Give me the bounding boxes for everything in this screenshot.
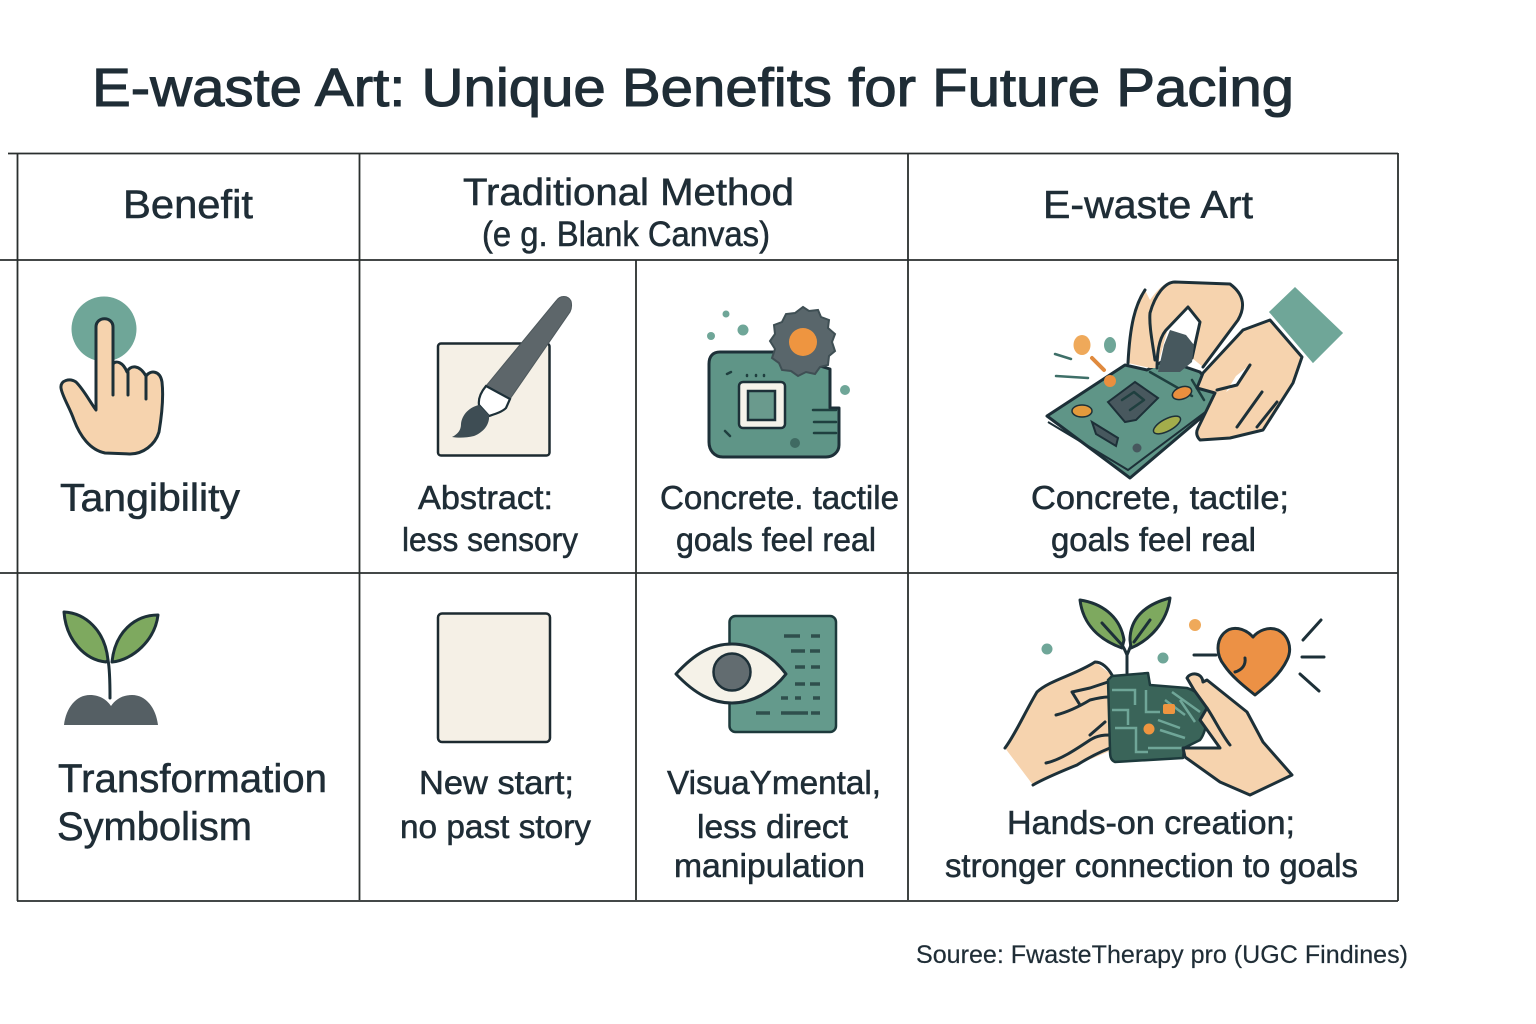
text: hands-on creation: Hands-on creation; — [1007, 804, 1295, 841]
text: abstract — [402, 479, 578, 558]
header: Traditional Method: Traditional Method — [463, 172, 794, 214]
icon: hands holding circuit with sprout and heart — [1005, 598, 1324, 795]
icon: eye and document — [676, 616, 836, 732]
text: concrete tactile (traditional column): Concrete. tactile — [660, 479, 899, 516]
text: concrete tactile (e-waste column): goals feel real — [1051, 521, 1256, 558]
text: new start: no past story — [400, 808, 591, 845]
text: visual mental: VisuaYmental, — [667, 764, 881, 801]
text: new start: New start; — [419, 764, 574, 801]
label: Tangibility: Tangibility — [60, 477, 241, 520]
text: visual mental: less direct — [697, 808, 848, 845]
source note: Souree: FwasteTherapy pro (UGC Findines) — [916, 941, 1408, 969]
icon: circuit board with gear — [707, 307, 850, 457]
text: concrete tactile (e-waste column) — [1031, 479, 1289, 558]
text: concrete tactile (traditional column): goals feel real — [676, 521, 876, 558]
label: transformation symbolism: Symbolism — [57, 805, 252, 849]
text: visual mental — [667, 764, 881, 884]
header: Traditional Method: (e g. Blank Canvas) — [482, 215, 770, 254]
label: transformation symbolism: Transformation — [58, 757, 327, 801]
label: transformation symbolism — [57, 757, 327, 849]
table grid — [0, 153, 1398, 901]
icon: hands working on circuit board — [1047, 282, 1342, 478]
title: E-waste Art: Unique Benefits for Future Pacing — [92, 58, 1294, 118]
icon: paint brush on canvas — [438, 296, 572, 456]
text: visual mental: manipulation — [674, 847, 865, 884]
text: concrete tactile (e-waste column): Concrete, tactile; — [1031, 479, 1289, 516]
icon: sprout — [64, 612, 158, 725]
header: Benefit: Benefit — [123, 183, 253, 227]
icon: pointing hand — [61, 296, 163, 454]
text: new start — [400, 764, 591, 845]
icon: blank canvas — [438, 614, 550, 742]
text: concrete tactile (traditional column) — [660, 479, 899, 558]
header: E-waste Art: E-waste Art — [1043, 184, 1253, 227]
text: abstract: less sensory — [402, 521, 578, 558]
header: Traditional Method — [463, 172, 794, 254]
text: hands-on creation — [945, 804, 1358, 884]
text: abstract: Abstract: — [418, 479, 553, 516]
text: hands-on creation: stronger connection to goals — [945, 847, 1358, 884]
